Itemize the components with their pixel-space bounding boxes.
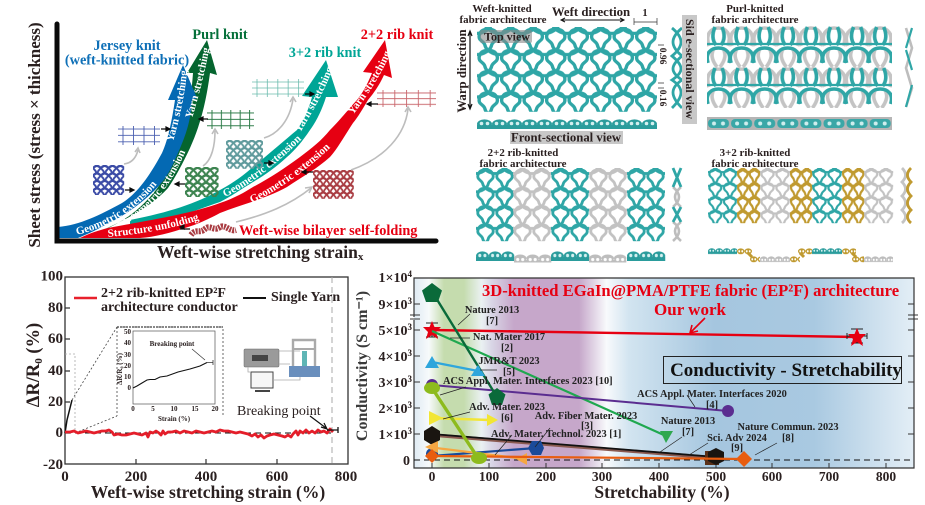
- inset chart: 0: [131, 405, 135, 413]
- y tick labels: 3: [408, 296, 412, 306]
- x tick labels: 300: [592, 469, 612, 484]
- x axis title: Weft-wise stretching strain: [157, 242, 358, 262]
- heading: 3+2 rib-knitted: 3+2 rib-knitted: [720, 147, 790, 159]
- x tick labels: 0: [429, 469, 436, 484]
- series: purple ACS 2020: [426, 379, 734, 417]
- ribbon labels: Structure unfolding: [108, 214, 200, 237]
- y tick labels: 4×10: [379, 350, 408, 365]
- series: 2+2 rib conductor: [65, 429, 333, 438]
- x tick labels: 400: [649, 469, 669, 484]
- legend: Single Yarn: [271, 290, 340, 305]
- dimension 0.96 and 0.16: [657, 45, 667, 107]
- heading: purl-knitted: fabric architecture: [712, 14, 799, 26]
- inset chart: 10: [124, 373, 132, 381]
- our work label: Our work: [654, 300, 727, 319]
- curve: 3+2 rib arrow: [130, 60, 338, 225]
- y tick labels: 100: [40, 268, 63, 284]
- front section: [707, 117, 892, 130]
- y tick labels: 9×10: [379, 298, 408, 313]
- literature labels: Nature 2013: [661, 416, 715, 427]
- heading: purl-knitted: Purl-knitted: [726, 3, 784, 15]
- dimension 1: [634, 8, 657, 25]
- fabric icons: stretched grids: [118, 79, 436, 145]
- literature labels: Adv. Mater. Technol. 2023 [1]: [491, 429, 621, 440]
- y tick labels: 0: [403, 454, 410, 469]
- fabric icon: folded bilayer: [191, 226, 236, 235]
- panel: weft-knitted architecture: [455, 3, 697, 144]
- purl fabric: [707, 26, 892, 108]
- series: Nature 2013 pentagon: [422, 283, 506, 405]
- plot frame: [65, 277, 348, 464]
- series: JMR&T 2023: [425, 356, 485, 376]
- x tick labels: 400: [195, 469, 217, 485]
- dimension 0.96 and 0.16: 0.96: [657, 48, 667, 65]
- chart: resistance change vs strain: [24, 268, 371, 502]
- y tick labels: 3: [408, 348, 412, 358]
- literature labels: JMR&T 2023: [478, 356, 540, 367]
- zero dashed line: [414, 459, 914, 461]
- literature labels: [3]: [581, 421, 593, 432]
- front-sectional view tag: Front-sectional view: [511, 130, 622, 144]
- y tick labels: 1×10: [379, 428, 408, 443]
- warp direction label: Warp direction: [455, 29, 469, 113]
- ribbon labels: Geometric extension: [123, 150, 186, 222]
- x tick labels: 0: [61, 469, 69, 485]
- literature labels: Adv. Mater. 2023: [469, 402, 545, 413]
- literature labels: [9]: [731, 443, 743, 454]
- y tick labels: 1×10: [379, 271, 408, 286]
- curve: jersey knit arrow: [58, 65, 197, 238]
- side-section gray yarn: [902, 168, 906, 223]
- series: Adv. Fiber Mater. navy: [426, 441, 544, 460]
- x tick labels: 500: [706, 469, 726, 484]
- panel: stress-strain schematic: [25, 22, 438, 263]
- y tick labels: 4: [408, 269, 412, 279]
- our work arrow: [690, 318, 705, 333]
- curve: purl knit arrow: [80, 40, 217, 238]
- x tick labels: [429, 469, 896, 484]
- literature labels: [8]: [782, 433, 794, 444]
- series: yellow-green ellipses: [424, 382, 487, 464]
- y tick labels: 40: [48, 363, 63, 379]
- y tick labels: 80: [48, 300, 63, 316]
- inset chart: 30: [124, 351, 132, 359]
- ribbon labels: Yarn stretching: [185, 48, 211, 117]
- top view tag: Top view: [484, 30, 530, 44]
- y tick labels: 3: [408, 322, 412, 332]
- y axis title: 0: [33, 358, 45, 364]
- x axis title: x: [358, 251, 364, 263]
- x tick labels: 800: [335, 469, 357, 485]
- legend: 2+2 rib-knitted EP²F: [101, 286, 226, 301]
- weft direction label: Weft direction: [552, 5, 630, 19]
- heading: 2+2 rib knit: 2+2 rib knit: [361, 27, 433, 43]
- ribbon labels: [76, 48, 388, 237]
- inset chart: Strain (%): [158, 415, 191, 423]
- heading: weft-knitted: fabric architecture: [460, 14, 547, 26]
- literature labels: Nat. Mater 2017: [473, 332, 545, 343]
- zero line: [65, 432, 335, 434]
- panel: purl-knitted architecture: [707, 3, 912, 130]
- series: our work: [423, 321, 867, 346]
- black pointer arrows: [125, 92, 378, 229]
- literature labels: [2]: [501, 343, 513, 354]
- rib fabric columns: [476, 168, 665, 241]
- legend: [74, 286, 340, 315]
- y tick labels: 20: [48, 394, 63, 410]
- inset chart: 40: [124, 339, 132, 347]
- series: Nat. Mater 2017: [432, 331, 673, 443]
- series: black hexagon with brown square: [424, 426, 724, 465]
- y axis title: Sheet stress (stress × thickness): [25, 22, 44, 248]
- breaking point arrow: [310, 416, 327, 429]
- heading: 3+2 rib knit: 3+2 rib knit: [289, 45, 361, 61]
- inset chart: 0: [128, 384, 132, 392]
- fabric icons: dense knits: [93, 140, 354, 199]
- side teal yarn: [906, 28, 912, 107]
- gray progression arrows: [124, 97, 411, 222]
- series: orange triangles: [425, 441, 527, 465]
- literature labels: [6]: [501, 413, 513, 424]
- chart title: 3D-knitted EGaIn@PMA/PTFE fabric (EP²F) architecture: [482, 281, 899, 300]
- heading: bilayer self-folding: Weft-wise bilayer self-folding: [239, 223, 418, 239]
- side-section gray yarn: [673, 187, 681, 241]
- inset chart: Breaking point: [150, 340, 195, 348]
- inset chart: 20: [124, 362, 132, 370]
- ribbon labels: Yarn stretching: [298, 66, 331, 132]
- x tick labels: 600: [266, 469, 288, 485]
- literature labels: Sci. Adv 2024: [707, 433, 767, 444]
- ribbon labels: Yarn stretching: [348, 50, 388, 114]
- top dashed inset edge: [117, 326, 223, 328]
- x tick labels: 800: [876, 469, 896, 484]
- legend: architecture conductor: [101, 300, 238, 315]
- inset chart: 15: [192, 405, 199, 413]
- dimension 0.96 and 0.16: 0.16: [657, 90, 667, 107]
- curve: 2+2 rib arrow: [80, 40, 392, 238]
- zoom guide lines: [65, 327, 223, 433]
- x tick labels: 100: [479, 469, 499, 484]
- literature labels: ACS Appl. Mater. Interfaces 2023 [10]: [443, 376, 613, 387]
- weft direction arrow: [561, 18, 624, 22]
- literature labels: Adv. Fiber Mater. 2023: [535, 411, 637, 422]
- front section beads: [476, 251, 665, 263]
- ribbon labels: Geometric extension: [223, 136, 302, 196]
- y tick labels: [40, 268, 63, 473]
- axis breaks: [410, 315, 918, 319]
- heading: jersey knit: Jersey knit: [93, 38, 161, 54]
- breaking end bar: [327, 427, 338, 433]
- tick marks: [414, 304, 914, 468]
- series: Adv. Mater. 2023: [429, 411, 498, 426]
- side-section teal yarn: [673, 168, 681, 222]
- x tick labels: 600: [762, 469, 782, 484]
- heading: purl knit: Purl knit: [192, 27, 248, 43]
- y tick labels: 3: [408, 400, 412, 410]
- tick marks: [65, 308, 277, 464]
- horizontal bars: [707, 44, 892, 85]
- side-sectional view tag: Sid e-sectional view: [683, 19, 697, 119]
- heading: weft-knitted: Weft-knitted: [472, 3, 532, 15]
- ribbon labels: Geometric extension: [250, 144, 330, 202]
- literature labels: [443, 305, 839, 454]
- chart: conductivity vs stretchability: [379, 269, 918, 502]
- y tick labels: 3: [408, 374, 412, 384]
- x tick labels: [61, 469, 357, 485]
- literature labels: ACS Appl. Mater. Interfaces 2020: [637, 389, 787, 400]
- x tick labels: 700: [819, 469, 839, 484]
- x axis title: Weft-wise stretching strain (%): [91, 482, 325, 502]
- heading: jersey knit: (weft-knitted fabric): [65, 52, 189, 68]
- dashed break line: [331, 277, 333, 464]
- literature labels: [7]: [486, 316, 498, 327]
- y tick labels: [379, 269, 412, 469]
- y tick labels: -20: [43, 457, 63, 473]
- rib fabric columns: [708, 168, 893, 223]
- y tick labels: 3: [408, 426, 412, 436]
- series: orange diamond: [425, 449, 752, 467]
- top-view knit fabric: [477, 27, 657, 112]
- heading: 3+2 rib-knitted: fabric architecture: [712, 158, 799, 170]
- y tick labels: 60: [48, 331, 63, 347]
- right axis title behind chart: Conductivity (S cm⁻¹): [354, 291, 371, 441]
- y tick labels: 3×10: [379, 376, 408, 391]
- plot frame: [414, 278, 914, 468]
- icon: test equipment: [244, 340, 320, 391]
- heading: 2+2 rib-knitted: 2+2 rib-knitted: [488, 147, 558, 159]
- plot background: [414, 278, 914, 468]
- y tick labels: 0: [56, 425, 63, 441]
- literature labels: [5]: [503, 367, 515, 378]
- x tick labels: 200: [125, 469, 147, 485]
- inset chart: 50: [124, 328, 132, 336]
- side-section yarn: [906, 28, 912, 107]
- breaking point label: Breaking point: [237, 404, 321, 419]
- warp direction arrow: [468, 31, 472, 109]
- leader lines: [440, 314, 777, 455]
- x tick labels: 200: [536, 469, 556, 484]
- ribbon labels: Geometric extension: [76, 182, 157, 234]
- inset chart: 10: [170, 405, 178, 413]
- panel: 2+2 rib-knitted architecture: [476, 147, 681, 263]
- y tick labels: 5×10: [379, 324, 408, 339]
- literature labels: Nature 2013: [465, 305, 519, 316]
- y tick labels: 2×10: [379, 402, 408, 417]
- heading: 2+2 rib-knitted: fabric architecture: [480, 158, 567, 170]
- y axis title: (%): [24, 323, 44, 358]
- front section stepped yarn: [708, 248, 893, 263]
- literature labels: [4]: [706, 400, 718, 411]
- inset chart: ΔR/R₀ (%): [116, 352, 124, 385]
- literature labels: Nature Commun. 2023: [737, 422, 839, 433]
- ribbon labels: Yarn stretching: [166, 70, 190, 140]
- inset chart: [116, 328, 219, 423]
- inset chart: 5: [151, 405, 155, 413]
- panel: 3+2 rib-knitted architecture: [708, 147, 911, 263]
- y axis title: ΔR/R: [24, 364, 44, 407]
- axes: [57, 24, 436, 241]
- front-section beads: [477, 119, 657, 130]
- literature labels: [7]: [682, 427, 694, 438]
- side-section yarn: [672, 28, 682, 108]
- x axis title: Stretchability (%): [594, 482, 730, 502]
- side-section gold yarn: [908, 168, 911, 223]
- series: single yarn: [65, 400, 72, 433]
- callout: conductivity - stretchability: Conductivity - Stretchability: [670, 360, 902, 381]
- dimension 1: 1: [642, 8, 648, 19]
- inset chart: 20: [212, 405, 219, 413]
